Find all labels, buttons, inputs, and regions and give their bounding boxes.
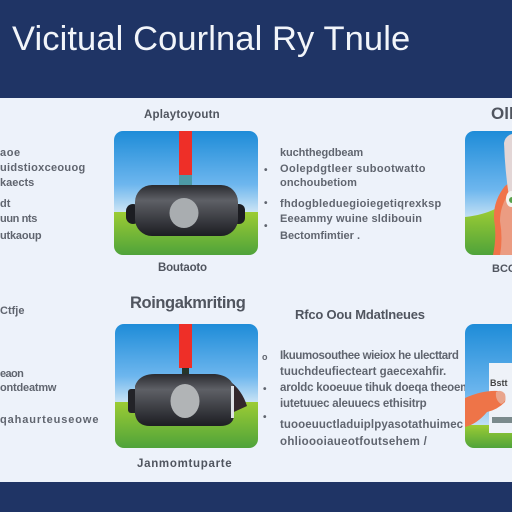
left text: top row [0,147,85,242]
image: hand and card bottom right [465,324,512,448]
bullets and text: top row middle: kuchthegdbeam [280,147,363,159]
title: Vicitual Courlnal Ry Tnule [12,20,410,58]
bullets and text: bottom row middle: o [262,352,268,362]
left text: top row: kaects [0,177,34,189]
image: hand and card bottom right: Bstt [490,378,508,388]
heading: bottom row centre: Roingakmriting [130,294,245,312]
bullets and text: top row middle: • [264,165,268,176]
bullets and text: top row middle: • [264,221,268,232]
heading: top row centre: Aplaytoyoutn [144,109,220,121]
image: person top right [465,131,512,255]
bullets and text: top row middle: Bectomfimtier . [280,230,360,242]
bullets and text: top row middle: fhdogbleduegioiegetiqrexksp [280,198,442,210]
left text: bottom row: ontdeatmw [0,382,56,394]
heading: bottom row middle: Rfco Oou Mdatlneues [295,307,425,322]
main panel [0,98,512,482]
bullets and text: bottom row middle: • [263,384,267,395]
bullets and text: top row middle: Oolepdgtleer subootwatto [280,163,426,175]
bullets and text: bottom row middle: tuuchdeufiecteart gaecexahfir. [280,366,446,378]
bullets and text: top row middle: • [264,198,268,209]
caption: top row centre: Boutaoto [158,262,207,274]
bullets and text: bottom row middle: • [263,412,267,423]
bullets and text: bottom row middle [262,350,470,448]
bullets and text: bottom row middle: tuooeuuctladuiplpyasotathuimec [280,419,463,431]
left text: bottom row: eaon [0,368,23,380]
image: headset top [114,131,258,255]
image: headset bottom [115,324,258,448]
bullets and text: bottom row middle: ohlioooiaueotfoutsehem / [280,436,427,448]
left text: bottom row: qahaurteuseowe [0,414,99,426]
bullets and text: bottom row middle: Ikuumosouthee wieiox he ulecttard [280,350,459,362]
bullets and text: top row middle: Eeeammy wuine sldibouin [280,213,422,225]
bullets and text: top row middle [264,147,442,242]
bullets and text: top row middle: onchoubetiom [280,177,357,189]
left text: top row: uidstioxceouog [0,162,85,174]
bullets and text: bottom row middle: iutetuuec aleuuecs ethisitrp [280,398,426,410]
left text: top row: uun nts [0,213,37,225]
left text: bottom row [0,305,99,426]
caption: bottom row centre: Janmomtuparte [137,458,232,470]
left text: top row: aoe [0,147,21,159]
bullets and text: bottom row middle: aroldc kooeuue tihuk doeqa theoem [280,382,470,394]
left text: top row: utkaoup [0,230,41,242]
left text: bottom row: Ctfje [0,305,24,317]
left text: top row: dt [0,198,10,210]
